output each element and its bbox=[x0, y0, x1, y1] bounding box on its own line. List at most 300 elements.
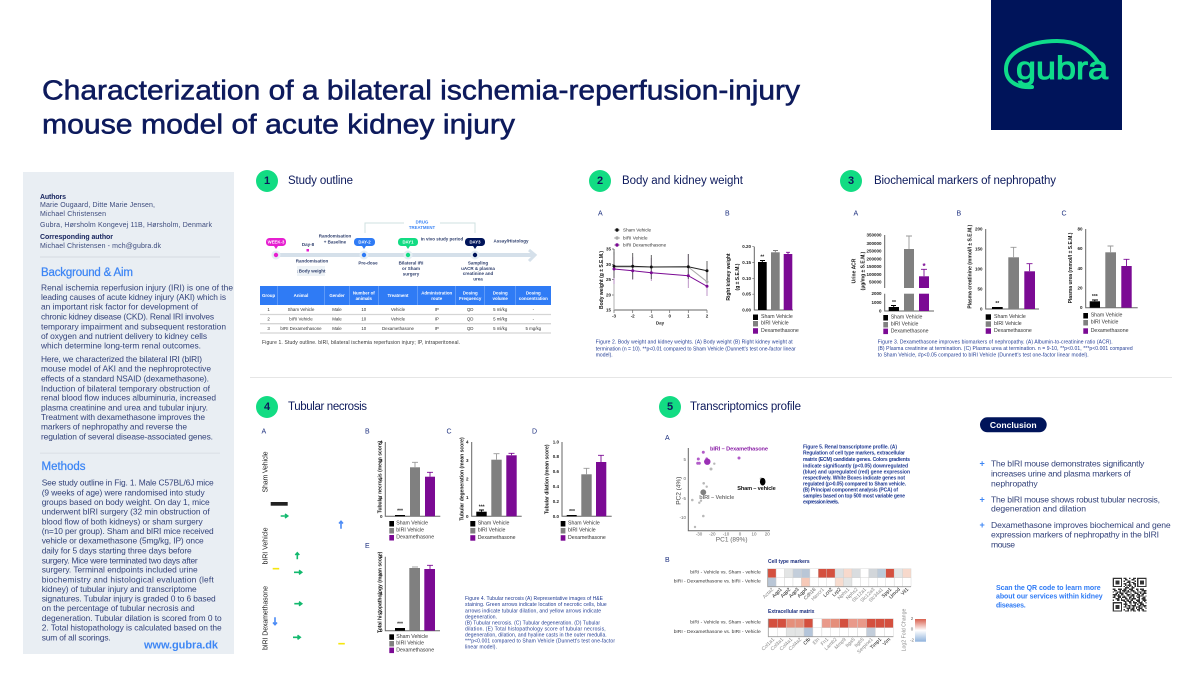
conclusion pill: Conclusion bbox=[990, 420, 1037, 430]
chart: PCA scatter: Sham – vehicle bbox=[737, 486, 776, 492]
chart: right kidney weight: 0.20 bbox=[742, 244, 751, 249]
chart: urine ACR: ** bbox=[892, 300, 896, 306]
chart: total histopathology: 8 bbox=[380, 554, 383, 559]
QR call to action: diseases. bbox=[996, 602, 1026, 610]
caption: figure 4: staining. Green arrows indicate location of necrotic cells, blue bbox=[465, 602, 607, 608]
table: study groups: Frequency bbox=[459, 296, 482, 301]
heatmap: extracellular matrix: Extracellular matrix bbox=[768, 609, 815, 615]
chart: right kidney weight: 0.05 bbox=[742, 292, 751, 297]
chart: tubular dilation: 1.0 bbox=[553, 440, 559, 444]
text: methods paragraph: groups based on body weight. On day 1, mice bbox=[42, 497, 210, 507]
heatmap: cell type markers: Aqp4 bbox=[796, 587, 809, 599]
chart: total histopathology: 6 bbox=[380, 572, 383, 578]
chart: PCA scatter: 20 bbox=[765, 532, 770, 536]
chart: PCA scatter: bIRI – Vehicle bbox=[699, 495, 734, 501]
caption: figure 5: Figure 5. Renal transcriptome profile. (A) bbox=[803, 444, 897, 450]
table: study groups: concentration bbox=[519, 296, 548, 301]
chart: urine ACR: 350000 bbox=[866, 232, 882, 238]
table: study groups: 3 bbox=[267, 326, 270, 331]
text: methods paragraph: sum of all scorings. bbox=[42, 632, 111, 642]
chart: tubular degeneration: Sham Vehicle bbox=[478, 521, 510, 527]
caption: figure 3: Figure 3. Dexamethasone improves biomarkers of nephropathy. (A) Albumin-to-creatinine ratio (ACR). bbox=[878, 340, 1113, 346]
table: study groups: Group bbox=[262, 293, 276, 298]
chart: tubular dilation: bIRI Vehicle bbox=[568, 528, 596, 534]
text: background paragraphs: temporary impairment and subsequent restoration bbox=[41, 321, 226, 331]
chart: plasma urea: 80 bbox=[1077, 226, 1083, 232]
chart: urine ACR: 0 bbox=[879, 308, 882, 314]
text: background paragraphs: effects of a standard NSAID (dexamethasone). bbox=[41, 373, 209, 383]
chart: body weight line chart: bIRI Dexamethasone bbox=[623, 242, 667, 248]
timeline: Randomisation bbox=[319, 234, 351, 238]
heatmap: cell type markers: Aqp1 bbox=[771, 587, 784, 599]
caption: figure 5: respectively. White Boxes indicate genes not bbox=[803, 475, 905, 481]
table: study groups: 2 bbox=[267, 316, 270, 322]
table: study groups: IP bbox=[435, 307, 439, 312]
heatmap: cell type markers: Acta2 bbox=[762, 587, 775, 600]
histology image labels and arrows: bIRI Dexamethasone bbox=[262, 586, 270, 650]
chart: right kidney weight: bIRI Vehicle bbox=[761, 321, 789, 327]
chart: total histopathology: bIRI Vehicle bbox=[396, 641, 424, 647]
chart: tubular degeneration: bIRI Vehicle bbox=[478, 528, 505, 534]
caption: figure 4: Figure 4. Tubular necrosis (A) Representative images of H&E bbox=[465, 596, 604, 602]
table: study groups bbox=[260, 286, 551, 333]
badge 4: 4 bbox=[264, 401, 271, 413]
chart: plasma urea: 40 bbox=[1077, 266, 1083, 271]
table: study groups: Vehicle bbox=[391, 307, 406, 312]
chart: body weight line chart: 0 bbox=[668, 314, 671, 318]
text: methods paragraph bbox=[42, 477, 222, 642]
heatmap: extracellular matrix: Col1a1 bbox=[761, 637, 776, 652]
conclusion bullets: + bbox=[980, 494, 985, 504]
text: background paragraphs: Induction of bilateral temporary obstruction of bbox=[41, 383, 211, 393]
QR call to action: about our services within kidney bbox=[996, 594, 1103, 600]
chart: plasma creatinine: Dexamethasone bbox=[994, 328, 1032, 334]
text: background paragraphs: mouse model of AKI and the nephroprotective bbox=[41, 364, 211, 374]
caption: figure 2: termination (n = 10). **p<0.01 compared to Sham Vehicle (Dunnett's test one-factor linear bbox=[596, 346, 796, 352]
table: study groups: Vehicle bbox=[391, 316, 406, 322]
chart: total histopathology: 2 bbox=[380, 610, 383, 615]
heading 5: Transcriptomics profile bbox=[690, 401, 801, 413]
caption: figure 2 bbox=[596, 340, 796, 359]
chart: urine ACR: 300000 bbox=[866, 241, 882, 246]
chart: PCA scatter: 0 bbox=[739, 532, 742, 536]
chart: tubular necrosis: 2 bbox=[380, 476, 383, 482]
table: study groups: Sham Vehicle bbox=[288, 307, 315, 312]
chart: plasma creatinine bbox=[956, 210, 1039, 334]
chart: tubular dilation: 0.2 bbox=[553, 499, 559, 504]
heading 4: Tubular necrosis bbox=[288, 401, 367, 413]
chart: total histopathology: 4 bbox=[380, 591, 383, 596]
chart: tubular dilation: 0.0 bbox=[553, 514, 559, 519]
chart: body weight line chart: -3 bbox=[612, 314, 616, 318]
authors block: Authors bbox=[40, 194, 66, 201]
chart: tubular necrosis: bIRI Vehicle bbox=[396, 528, 424, 534]
text: methods paragraph: (n=10 per group). Sham and bIRI mice received bbox=[42, 526, 214, 536]
text: methods paragraph: daily for 5 days starting three days before bbox=[42, 545, 192, 555]
heatmap: cell type markers: Aqp2 bbox=[780, 587, 792, 599]
text: methods paragraph: degeneration. Tubular dilation is scored from 0 to bbox=[42, 613, 222, 623]
chart: tubular dilation: *** bbox=[569, 509, 575, 515]
conclusion bullets: + bbox=[980, 520, 985, 530]
table: study groups: Dexamethasone bbox=[382, 326, 415, 331]
table: study groups: Male bbox=[332, 326, 342, 331]
chart: PCA scatter: PC2 (4%) bbox=[676, 477, 682, 505]
table: study groups: 5 ml/kg bbox=[493, 316, 508, 322]
chart: PCA scatter: -20 bbox=[709, 532, 716, 536]
chart: tubular degeneration: C bbox=[446, 428, 452, 436]
heatmap: cell type markers: Nphs1 bbox=[837, 587, 851, 601]
chart: tubular degeneration: 0 bbox=[466, 514, 469, 519]
table: study groups: QD bbox=[467, 326, 473, 331]
badge 5 bbox=[659, 396, 681, 418]
chart: tubular dilation: 0.6 bbox=[553, 469, 559, 474]
chart: plasma creatinine: bIRI Vehicle bbox=[994, 321, 1022, 327]
timeline: In vivo study period bbox=[421, 236, 463, 242]
logo: gubra bbox=[991, 0, 1122, 130]
heatmap: extracellular matrix: Lamb2 bbox=[824, 637, 839, 652]
table: study groups: bIRI Dexamethasone bbox=[280, 326, 322, 331]
legend: log2 fold change: -2 bbox=[910, 638, 914, 642]
caption: figure 4: degeneration, dilation, and hyaline casts in the outer medulla. bbox=[465, 633, 607, 639]
chart: tubular necrosis: 0 bbox=[380, 514, 383, 519]
chart: plasma urea: C bbox=[1062, 210, 1067, 218]
link: website: www.gubra.dk bbox=[143, 640, 219, 652]
text: methods paragraph: vehicle or dexamethasone (5mg/kg, IP) once bbox=[42, 536, 204, 546]
caption: figure 2: Figure 2. Body weight and kidney weights. (A) Body weight (B) Right kidney weight at bbox=[596, 340, 793, 346]
chart: plasma urea: Dexamethasone bbox=[1091, 328, 1129, 334]
table: study groups: animals bbox=[356, 296, 373, 301]
heatmap: extracellular matrix: Eln bbox=[812, 637, 821, 646]
text: methods paragraph: surgery. Mice were terminated two days after bbox=[42, 555, 198, 565]
chart: body weight line chart: 20 bbox=[606, 292, 611, 298]
heatmap: extracellular matrix: Mmp9 bbox=[834, 637, 848, 651]
conclusion bullets: The bIRI mouse shows robust tubular necrosis, bbox=[991, 494, 1160, 504]
heatmap: extracellular matrix: Col3a1 bbox=[770, 637, 785, 652]
badge 4 bbox=[256, 396, 278, 418]
chart: tubular degeneration bbox=[446, 428, 522, 541]
chart: body weight line chart: Sham Vehicle bbox=[623, 228, 652, 232]
caption: figure 5: samples based on top 500 most variable gene bbox=[803, 493, 905, 499]
chart: plasma urea: 0 bbox=[1080, 305, 1083, 310]
heatmap: cell type markers: Cell type markers bbox=[768, 559, 810, 565]
table: study groups: bIRI Vehicle bbox=[289, 316, 313, 322]
chart: tubular dilation: Sham Vehicle bbox=[568, 521, 600, 527]
chart: tubular degeneration: 2 bbox=[466, 476, 469, 482]
text: methods paragraph: surgery. Terminal endpoints included urine bbox=[42, 565, 198, 575]
chart: tubular degeneration: 3 bbox=[466, 458, 469, 463]
chart: plasma creatinine: B bbox=[956, 210, 962, 218]
chart: right kidney weight: B bbox=[725, 210, 730, 218]
caption: figure 5: regulated (p>0.05) compared to Sham vehicle. bbox=[803, 481, 907, 487]
timeline: Bilateral IRI bbox=[399, 260, 423, 266]
table: study groups: Treatment bbox=[388, 293, 409, 298]
chart: PCA scatter: -10 bbox=[679, 515, 686, 520]
chart: tubular dilation: D bbox=[532, 428, 537, 436]
legend: log2 fold change bbox=[901, 609, 926, 651]
heatmap: cell type markers: Lcn2 bbox=[822, 587, 834, 599]
conclusion pill bbox=[980, 417, 1047, 432]
chart: urine ACR: 100000 bbox=[866, 272, 882, 277]
chart: urine ACR: bIRI Vehicle bbox=[891, 322, 918, 328]
badge 1: 1 bbox=[264, 175, 270, 187]
table: study groups: - bbox=[533, 307, 535, 312]
legend: log2 fold change: 0 bbox=[911, 626, 914, 632]
table: study groups: QD bbox=[467, 307, 473, 312]
chart: tubular necrosis bbox=[365, 428, 440, 541]
chart: urine ACR bbox=[852, 210, 934, 334]
text: background paragraphs: regulation of several disease-associated genes. bbox=[41, 432, 213, 442]
QR call to action bbox=[996, 585, 1103, 610]
chart: PCA scatter: 10 bbox=[751, 532, 757, 536]
heatmap: extracellular matrix: Vim bbox=[882, 637, 892, 647]
timeline: or Sham bbox=[402, 266, 420, 271]
chart: urine ACR: 1000 bbox=[871, 300, 882, 305]
panel: conclusion bbox=[980, 417, 1171, 612]
caption: figure 4: dilation. (E) Total histopathology score of tubular necrosis, bbox=[465, 626, 606, 632]
logo: gubra: gubra bbox=[1016, 50, 1108, 86]
chart: plasma creatinine: 200 bbox=[975, 226, 983, 232]
caption: figure 2: model). bbox=[596, 353, 613, 359]
heatmap: extracellular matrix: bIRI - Dexamethasone vs. bIRI - Vehicle bbox=[674, 629, 761, 635]
chart: tubular necrosis: 4 bbox=[380, 440, 383, 444]
chart: PCA scatter: -30 bbox=[696, 532, 703, 536]
timeline: Pre-dose bbox=[358, 260, 378, 266]
chart: right kidney weight: Sham Vehicle bbox=[761, 314, 793, 320]
chart: total histopathology: Total histopathology (mean score) bbox=[378, 551, 384, 633]
chart: body weight line chart: 1 bbox=[687, 314, 690, 318]
chart: PCA scatter: bIRI – Dexamethasone bbox=[710, 446, 768, 452]
conclusion bullets: nephropathy bbox=[991, 479, 1038, 489]
table: study groups: 10 bbox=[361, 316, 367, 322]
timeline: ↓Body weight bbox=[296, 268, 326, 274]
timeline: uACR & plasma bbox=[461, 266, 495, 271]
table: study groups: 5 mg/kg bbox=[525, 326, 542, 331]
caption: figure 4: degeneration. bbox=[465, 614, 497, 620]
authors block: Michael Christensen bbox=[40, 211, 106, 218]
heading: methods: Methods bbox=[42, 461, 86, 473]
table: study groups: - bbox=[533, 316, 535, 322]
chart: right kidney weight: 0.00 bbox=[742, 308, 751, 312]
chart: total histopathology bbox=[365, 543, 440, 653]
heading 3: Biochemical markers of nephropathy bbox=[874, 175, 1056, 187]
table: study groups: Male bbox=[332, 316, 342, 322]
conclusion bullets: mouse bbox=[991, 539, 1015, 549]
chart: PCA scatter bbox=[665, 435, 776, 544]
chart: total histopathology: Dexamethasone bbox=[396, 647, 434, 653]
caption: figure 5: matrix (ECM) candidate genes. Colors gradients bbox=[803, 457, 910, 463]
chart: total histopathology: *** bbox=[397, 622, 403, 628]
chart: body weight line chart: 15 bbox=[606, 308, 611, 312]
text: background paragraphs: renal blood flow induces albuminuria, increased bbox=[41, 393, 216, 403]
caption: figure 3 bbox=[878, 340, 1133, 358]
timeline: surgery bbox=[403, 272, 420, 276]
heatmap: extracellular matrix: Serpine1 bbox=[856, 637, 875, 655]
heatmap: extracellular matrix: Itga5 bbox=[845, 637, 857, 649]
timeline: Randomisation bbox=[296, 258, 328, 264]
badge 3: 3 bbox=[848, 175, 854, 187]
table: study groups: route bbox=[431, 296, 443, 301]
chart: urine ACR: Dexamethasone bbox=[891, 328, 929, 334]
chart: plasma creatinine: 0 bbox=[980, 306, 983, 312]
timeline: DRUG bbox=[416, 220, 429, 224]
timeline: creatinine and bbox=[463, 271, 494, 276]
chart: plasma creatinine: Sham Vehicle bbox=[994, 314, 1026, 320]
caption: figure 3: to Sham Vehicle, #p<0.05 compared to bIRI Vehicle (Dunnett's test one-factor linear model). bbox=[878, 352, 1089, 358]
caption: figure 4: arrows indicate tubular dilation, and yellow arrows indicate bbox=[465, 608, 601, 614]
heatmap: cell type markers: bIRI - Dexamethasone vs. bIRI - Vehicle bbox=[674, 578, 761, 584]
chart: plasma urea bbox=[1062, 210, 1138, 334]
text: methods paragraph: underwent bIRI surgery (32 min obstruction of bbox=[42, 507, 210, 517]
chart: plasma urea: bIRI Vehicle bbox=[1091, 320, 1118, 326]
chart: tubular necrosis: Dexamethasone bbox=[396, 535, 434, 541]
panel: sidebar bbox=[23, 172, 234, 654]
table: study groups: QD bbox=[467, 316, 473, 322]
heatmap: cell type markers: bIRI - Vehicle vs. Sham - vehicle bbox=[690, 570, 761, 576]
chart: body weight line chart: bIRI Vehicle bbox=[623, 236, 648, 240]
table: study groups: Number of bbox=[353, 290, 375, 296]
authors block bbox=[40, 194, 212, 250]
chart: body weight line chart: 25 bbox=[606, 277, 611, 282]
heatmap: extracellular matrix: bIRI - Vehicle vs. Sham - vehicle bbox=[690, 620, 761, 626]
timeline: Sampling bbox=[468, 260, 488, 266]
conclusion bullets: expression markers of nephropathy in the bIRI bbox=[991, 529, 1159, 539]
panel 5: transcriptomics profile bbox=[659, 396, 926, 655]
chart: right kidney weight: 0.15 bbox=[742, 260, 751, 265]
table: study groups: Dosing bbox=[493, 290, 508, 296]
chart: tubular degeneration: 4 bbox=[466, 440, 469, 444]
caption: figure 5: (B) Principal component analysis (PCA) of bbox=[803, 487, 898, 493]
chart: PCA scatter: 0 bbox=[683, 476, 686, 481]
conclusion bullets: degeneration and dilation bbox=[991, 504, 1086, 514]
heatmap: extracellular matrix: Itgb5 bbox=[854, 637, 866, 649]
chart: right kidney weight: Right kidney weight bbox=[726, 253, 732, 301]
badge 2 bbox=[589, 170, 611, 192]
heatmap: cell type markers: Umod bbox=[888, 587, 902, 601]
table: study groups: Administration bbox=[421, 290, 453, 296]
heatmap: cell type markers: Lrp2 bbox=[831, 587, 843, 598]
panel 2: body and kidney weight bbox=[589, 170, 799, 359]
text: methods paragraph: kidney) of tubular injury and transcriptome bbox=[42, 584, 197, 594]
text: background paragraphs: which determine long-term renal outcomes. bbox=[40, 341, 201, 351]
conclusion bullets: Dexamethasone improves biochemical and gene bbox=[991, 520, 1171, 530]
text: background paragraphs: Treatment with dexamethasone improves the bbox=[41, 412, 205, 422]
chart: total histopathology: 0 bbox=[380, 628, 383, 633]
timeline: + Baseline bbox=[324, 240, 347, 244]
chart: urine ACR: 200000 bbox=[866, 256, 882, 262]
text: background paragraphs: of oxygen and nutrient delivery to kidney cells bbox=[41, 331, 207, 341]
table: study groups: 10 bbox=[361, 307, 367, 312]
text: background paragraphs bbox=[40, 282, 233, 442]
chart: body weight line chart: Body weight (g ± S.E.M.) bbox=[599, 251, 605, 309]
chart: plasma creatinine: 150 bbox=[975, 246, 983, 252]
chart: body weight line chart: -2 bbox=[631, 314, 635, 318]
heatmap: cell type markers: Vil1 bbox=[900, 587, 910, 597]
table: study groups: Dosing bbox=[526, 290, 541, 296]
chart: tubular dilation: Tubular dilation (mean score) bbox=[544, 444, 550, 514]
authors block: Michael Christensen - mch@gubra.dk bbox=[40, 243, 162, 250]
text: background paragraphs: an important risk factor for development of bbox=[41, 302, 199, 312]
chart: body weight line chart: 35 bbox=[606, 246, 611, 252]
chart: total histopathology: Sham Vehicle bbox=[396, 634, 428, 640]
chart: PCA scatter: PC1 (89%) bbox=[716, 536, 748, 544]
timeline: Day-8 bbox=[302, 242, 315, 247]
chart: right kidney weight: Dexamethasone bbox=[761, 328, 799, 334]
heatmap: cell type markers: Havcr1 bbox=[810, 587, 826, 602]
caption: figure 4: linear model). bbox=[465, 644, 497, 650]
chart: PCA scatter: A bbox=[665, 435, 670, 442]
text: methods paragraph: on the percentage of tubular necrosis and bbox=[42, 603, 195, 613]
histology image labels and arrows: Sham Vehicle bbox=[262, 451, 270, 492]
heading 2: Body and kidney weight bbox=[622, 175, 744, 187]
timeline: WEEK-3 bbox=[268, 240, 285, 244]
chart: urine ACR: 150000 bbox=[866, 264, 882, 269]
histology image labels and arrows: bIRI Vehicle bbox=[262, 527, 270, 564]
timeline: DAY3 bbox=[469, 240, 481, 244]
chart: urine ACR: Urine ACR bbox=[852, 258, 858, 283]
chart: tubular degeneration: Tubular degeneration (mean score) bbox=[459, 437, 465, 521]
heatmap: extracellular matrix: Col4a1 bbox=[779, 637, 794, 652]
chart: urine ACR: (µg/mg ± S.E.M.) bbox=[860, 251, 866, 290]
table: study groups: Dosing bbox=[463, 290, 478, 296]
chart: urine ACR: A bbox=[854, 210, 858, 218]
histology image labels and arrows bbox=[262, 428, 345, 650]
heatmap: cell type markers: Aqp3 bbox=[788, 587, 801, 599]
chart: tubular necrosis: Sham Vehicle bbox=[396, 521, 428, 527]
heatmap: extracellular matrix: Fn1 bbox=[820, 637, 830, 647]
heatmap: extracellular matrix: Col4a2 bbox=[788, 637, 803, 652]
heatmap: cell type markers: Spp1 bbox=[881, 587, 893, 599]
caption: figure 5: Regulation of cell type markers, extracellular bbox=[803, 451, 905, 457]
panel 3: biochemical markers bbox=[840, 170, 1138, 358]
title: Characterization of a bilateral ischemia-reperfusion-injury bbox=[42, 74, 800, 106]
text: methods paragraph: blood flow of both kidneys) or sham surgery bbox=[42, 516, 204, 526]
legend: log2 fold change: Log2 Fold Change bbox=[901, 609, 907, 651]
histology image labels and arrows: A bbox=[262, 428, 266, 436]
chart: tubular degeneration: *** bbox=[479, 505, 485, 511]
badge 1 bbox=[256, 170, 278, 192]
text: methods paragraph: (9 weeks of age) were randomised into study bbox=[42, 487, 206, 497]
text: background paragraphs: plasma creatinine and urea and tubular injury. bbox=[41, 402, 208, 412]
caption: figure 5: indicate significantly (p<0.05) downregulated bbox=[803, 463, 908, 469]
timeline: urea bbox=[473, 276, 483, 282]
table: study groups: 5 ml/kg bbox=[493, 326, 508, 331]
chart: tubular dilation: 0.4 bbox=[553, 484, 559, 489]
chart: tubular dilation: Dexamethasone bbox=[568, 535, 606, 541]
badge 3 bbox=[840, 170, 862, 192]
table: study groups: IP bbox=[435, 316, 439, 322]
chart: urine ACR: 2000 bbox=[871, 291, 882, 296]
timeline: DAY1 bbox=[402, 240, 414, 244]
text: background paragraphs: Here, we characterized the bilateral IRI (bIRI) bbox=[41, 354, 202, 364]
table: study groups: 10 bbox=[361, 326, 367, 331]
chart: PCA scatter: -10 bbox=[723, 532, 730, 536]
panel 4: tubular necrosis bbox=[256, 396, 615, 653]
table: study groups: IP bbox=[435, 326, 439, 331]
text: methods paragraph: See study outline in Fig. 1. Male C57BL/6J mice bbox=[42, 477, 214, 487]
heatmap: cell type markers: Slc12a1 bbox=[851, 587, 868, 604]
heading 1: Study outline bbox=[288, 175, 353, 187]
title: mouse model of acute kidney injury bbox=[42, 108, 515, 140]
conclusion bullets: The bIRI mouse demonstrates significantly bbox=[991, 458, 1145, 468]
chart: tubular degeneration: Dexamethasone bbox=[478, 535, 516, 541]
chart: urine ACR: 50000 bbox=[869, 280, 882, 284]
chart: tubular necrosis: B bbox=[365, 428, 370, 436]
chart: body weight line chart: 30 bbox=[606, 262, 611, 267]
caption: figure 5 bbox=[803, 444, 910, 506]
badge 2: 2 bbox=[597, 175, 603, 187]
timeline: Assay/Histology bbox=[493, 238, 529, 244]
caption: figure 3: (B) Plasma creatinine at termination. (C) Plasma urea at termination. n = 9-10, **p<0.01, ***p<0.001 compared bbox=[878, 346, 1133, 352]
